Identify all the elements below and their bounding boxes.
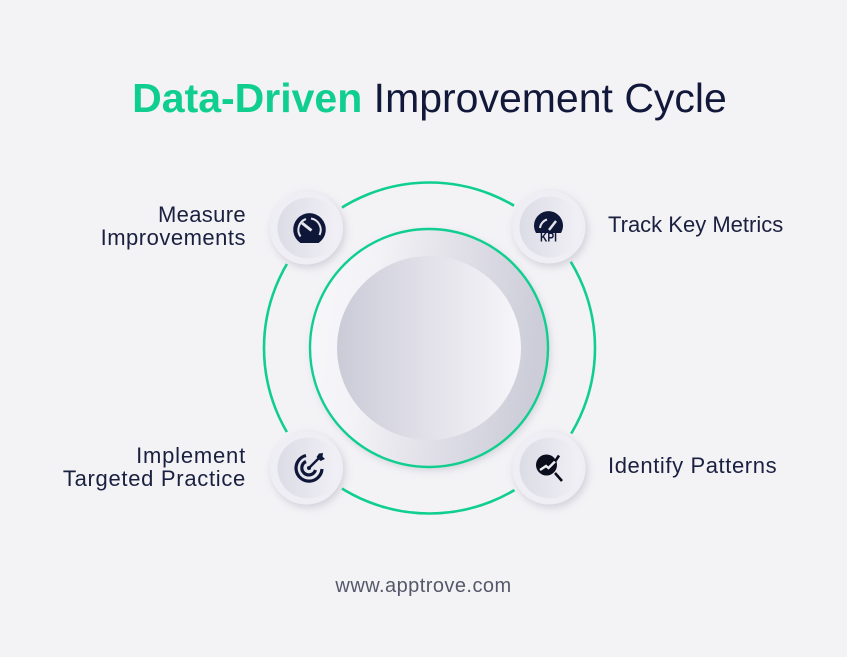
label: identify patterns: Identify Patterns: [608, 453, 777, 478]
label: measure improvements: Measure: [158, 202, 246, 227]
icon: KPI gauge: KPI: [540, 230, 557, 244]
label: implement targeted practice: Implement: [136, 443, 246, 468]
label: implement targeted practice: [63, 443, 246, 491]
label: measure improvements: [101, 202, 246, 250]
label: implement targeted practice: Targeted Practice: [63, 466, 246, 491]
outer ring: [264, 182, 595, 514]
node: track key metrics: [508, 186, 590, 268]
icon: magnifier with trend: [536, 454, 562, 481]
title: Data-Driven Improvement Cycle: [132, 75, 727, 121]
node: identify patterns: [508, 427, 590, 509]
node: measure improvements: [266, 187, 348, 269]
label: track key metrics: Track Key Metrics: [608, 212, 783, 237]
website url: www.apptrove.com: [335, 575, 512, 597]
label: measure improvements: Improvements: [101, 225, 246, 250]
icon: speedometer: [293, 213, 326, 243]
icon: target: [296, 453, 325, 481]
node: implement targeted practice: [266, 427, 348, 509]
central disc: [310, 229, 548, 467]
